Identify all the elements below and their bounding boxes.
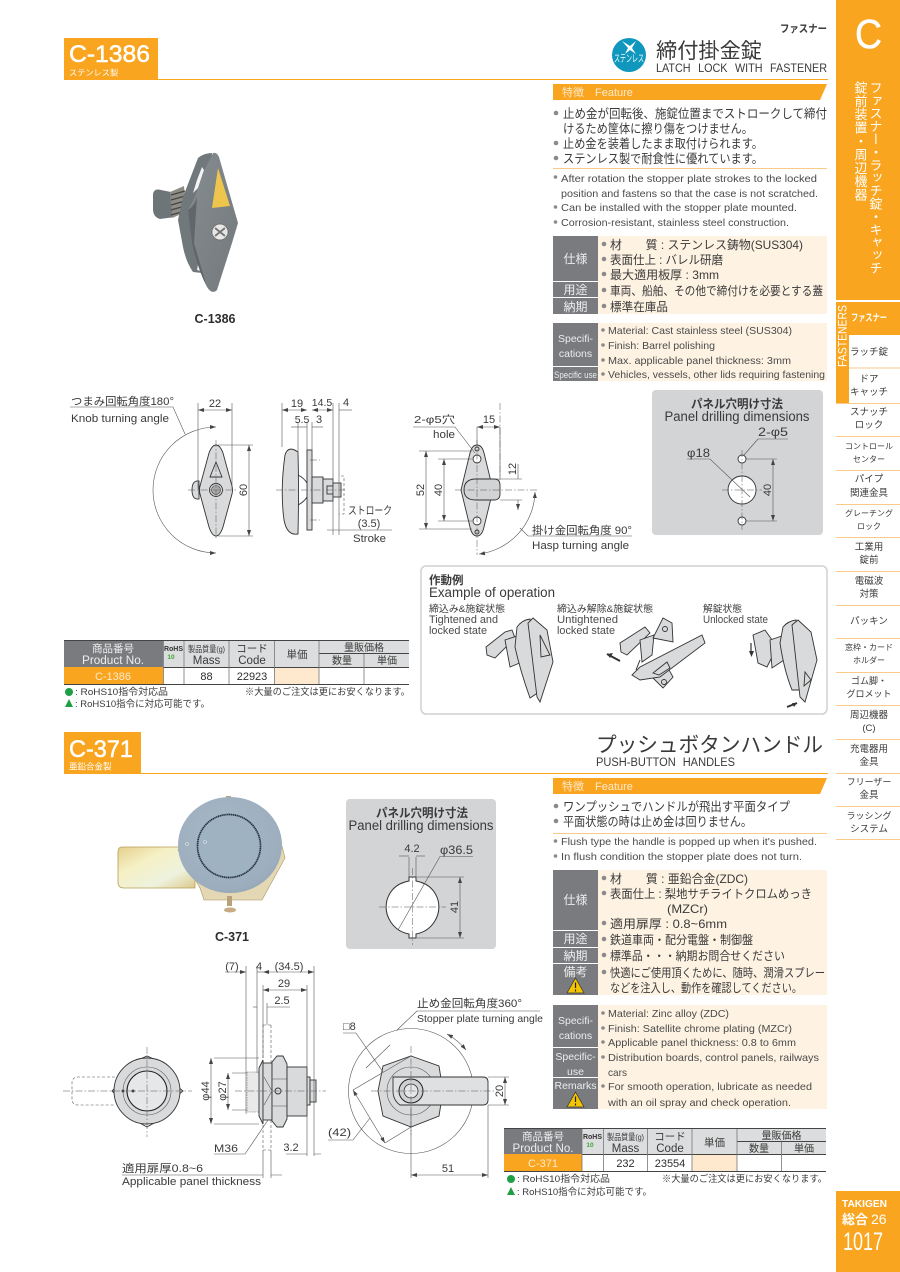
sidebar menu items: スナッチ: [850, 407, 888, 418]
dimension drawing: knob front view: [70, 395, 253, 553]
table headers: コード: [654, 1131, 686, 1143]
hasp view dimension labels: 52: [415, 484, 427, 496]
figure: tightened state: [486, 618, 553, 702]
table notes: C-1386: : RoHS10指令対応品: [75, 686, 168, 698]
feature list English: In flush condition the stopper plate does not turn.: [561, 851, 802, 863]
spec table English: Distribution boards, control panels, railways: [608, 1052, 819, 1064]
spec table Japanese: 標準品・・・納期お問合せください: [610, 948, 785, 963]
side view dimension labels: 4: [256, 961, 262, 973]
panel: drilling dimensions C-371: [346, 799, 496, 949]
sidebar menu items: センター: [853, 455, 885, 464]
table headers: 商品番号: [92, 642, 134, 655]
sidebar menu items: ロック: [855, 420, 883, 431]
feature list Japanese: [554, 106, 827, 166]
sidebar menu items: 金具: [859, 789, 879, 801]
spec table English: Applicable panel thickness: 0.8 to 6mm: [608, 1037, 796, 1049]
side view dimension labels: 2.5: [274, 995, 290, 1007]
rear view dimension labels: 止め金回転角度360°: [417, 997, 522, 1010]
spec table Japanese: 用途: [563, 283, 588, 297]
feature list English: [554, 173, 818, 229]
spec table Japanese: 用途: [563, 932, 588, 946]
knob dimension labels: [71, 395, 250, 496]
spec table English: with an oil spray and check operation.: [607, 1097, 791, 1109]
page number block: TAKIGEN: [842, 1199, 887, 1210]
sidebar menu items: ラッチ錠: [850, 347, 888, 358]
FASTENERS tab: FASTENERS: [838, 305, 850, 367]
hasp view dimension labels: Hasp turning angle: [532, 540, 629, 552]
sidebar menu items: 対策: [859, 588, 879, 600]
table row: 23554: [655, 1158, 685, 1170]
table headers: 数量: [332, 654, 352, 667]
table headers: 商品番号: [522, 1130, 564, 1143]
sidebar menu items: 充電器用: [850, 744, 888, 755]
table row: 22923: [237, 671, 267, 683]
product title: 締付掛金錠: [656, 40, 762, 63]
dimension drawing: latch side view: [276, 397, 392, 545]
table notes: C-1386: ※大量のご注文は更にお安くなります。: [245, 686, 410, 698]
table row: 232: [616, 1158, 635, 1170]
knob dimension labels: Knob turning angle: [71, 413, 169, 425]
spec table Japanese: 材 質 : 亜鉛合金(ZDC): [610, 871, 748, 886]
spec table Japanese: 仕様: [563, 893, 588, 907]
spec table English: Finish: Barrel polishing: [608, 340, 715, 352]
side view dimension labels: (3.5): [358, 518, 380, 530]
sidebar menu items: (C): [862, 723, 876, 734]
sidebar menu items: グロメット: [846, 688, 892, 699]
feature list Japanese: けるため筐体に擦り傷をつけません。: [563, 121, 753, 136]
table headers: Product No.: [512, 1143, 574, 1155]
state labels: [429, 603, 768, 637]
spec table Japanese: 材 質 : ステンレス鋳物(SUS304): [610, 237, 803, 252]
state labels: locked state: [429, 625, 487, 637]
figure: untightened state: [607, 618, 705, 688]
spec table English: Vehicles, vessels, other lids requiring fastening: [608, 369, 825, 381]
table headers: Mass: [193, 655, 220, 667]
side view dimension labels: 4: [343, 397, 349, 409]
hasp view dimension labels: 2-φ5穴: [414, 414, 456, 426]
page number block: 26: [871, 1211, 887, 1227]
state labels: 解錠状態: [703, 603, 742, 615]
feature panel: C-1386: [553, 84, 827, 381]
hasp view dimension labels: [414, 414, 632, 552]
state labels: 締込み解除&施錠状態: [557, 603, 654, 615]
panel: drilling dimensions C-1386: 40: [762, 484, 774, 496]
panel: drilling dimensions C-371: 41: [449, 901, 461, 913]
operation heading: Example of operation: [429, 585, 555, 600]
figure: unlocked state: [749, 620, 817, 707]
product photo: C-1386 latch: [153, 153, 238, 292]
side view dimension labels: 29: [278, 978, 290, 990]
product subtitle: PUSH-BUTTON HANDLES: [596, 757, 735, 769]
state labels: Tightened and: [429, 614, 498, 626]
state labels: locked state: [557, 625, 615, 637]
spec table Japanese: などを注入し、動作を確認してください。: [610, 980, 802, 995]
feature heading bar: 特徴 Feature: [562, 85, 633, 99]
FASTENERS tab: ファスナー: [851, 313, 887, 324]
table row: [95, 671, 267, 683]
sidebar menu items: キャッチ: [850, 387, 888, 398]
feature list Japanese: 止め金を装着したまま取付けられます。: [563, 136, 763, 151]
product subtitle: LATCH LOCK WITH FASTENER: [656, 61, 827, 75]
feature list English: position and fastens so that the case is not scratched.: [561, 188, 818, 200]
table headers: 単価: [377, 654, 397, 667]
panel: drilling dimensions C-371: 4.2: [404, 843, 420, 855]
feature list Japanese: 平面状態の時は止め金は回りません。: [563, 815, 752, 829]
spec table English: Specifi-: [558, 1015, 594, 1027]
panel: drilling dimensions C-371: パネル穴明け寸法: [376, 805, 468, 820]
rear view dimension labels: (42): [328, 1127, 351, 1139]
feature heading bar: [553, 778, 827, 794]
spec table English: Material: Cast stainless steel (SUS304): [608, 325, 792, 337]
sidebar menu items: 周辺機器: [850, 709, 888, 721]
table headers: Mass: [612, 1143, 639, 1155]
sidebar menu items: ドア: [859, 374, 879, 385]
side view dimension labels: 14.5: [312, 397, 332, 409]
table headers: [512, 1129, 814, 1155]
page number block: 総合: [842, 1212, 868, 1227]
knob dimension labels: 22: [209, 398, 221, 410]
sidebar menu items: フリーザー: [847, 777, 891, 787]
spec table Japanese: 表面仕上 : バレル研磨: [610, 253, 723, 267]
icon: stainless badge: [612, 38, 646, 72]
dimension drawing: handle side view: [122, 961, 326, 1188]
spec table Japanese: 車両、船舶、その他で締付けを必要とする蓋: [610, 283, 823, 298]
product photo: C-371 handle: [118, 796, 285, 912]
spec table English: Remarks: [554, 1080, 597, 1092]
side view dimension labels: Applicable panel thickness: [122, 1176, 262, 1188]
sidebar menu items: 金具: [859, 756, 879, 768]
hasp view dimension labels: hole: [433, 429, 455, 441]
product label: C-371: C-371: [215, 930, 249, 944]
sidebar menu items: ホルダー: [853, 655, 885, 665]
state labels: 締込み&施錠状態: [429, 603, 506, 615]
sidebar menu items: コントロール: [845, 442, 893, 451]
feature list Japanese: ワンプッシュでハンドルが飛出す平面タイプ: [563, 799, 790, 814]
table headers: Code: [656, 1143, 684, 1155]
sidebar menu items: 錠前: [859, 554, 879, 566]
section header: C-371: C-371: [69, 736, 133, 763]
product label: C-1386: C-1386: [194, 312, 236, 326]
dimension drawing: handle rear view: [328, 997, 543, 1178]
spec table English: [553, 1005, 827, 1109]
sidebar menu items: ゴム脚・: [851, 675, 887, 686]
feature list Japanese: [554, 799, 790, 829]
side view dimension labels: Stroke: [353, 533, 386, 545]
spec table Japanese: [553, 870, 827, 995]
panel: example of operation: [421, 566, 827, 714]
spec table Japanese: 仕様: [563, 252, 588, 266]
hasp view dimension labels: 15: [483, 414, 495, 426]
table headers: 製品質量(g): [607, 1132, 644, 1142]
spec table Japanese: 快適にご使用頂くために、随時、潤滑スプレー: [610, 965, 825, 980]
page number block: [836, 1191, 900, 1272]
table headers: 10: [167, 654, 175, 661]
table headers: 10: [586, 1142, 594, 1149]
sidebar menu items: 工業用: [855, 541, 883, 553]
sidebar menu items: グレーチング: [845, 508, 893, 518]
sidebar menu items: ラッシング: [846, 810, 892, 821]
section header: C-371: [64, 732, 828, 774]
spec table English: [553, 323, 827, 381]
table row: [528, 1158, 685, 1170]
hasp view dimension labels: 12: [507, 463, 519, 475]
material: ステンレス製: [69, 68, 118, 78]
spec table Japanese: 適用扉厚 : 0.8~6mm: [610, 917, 727, 931]
spec table Japanese: 納期: [563, 948, 588, 963]
spec table Japanese: 納期: [563, 299, 588, 314]
category label: ファスナー: [780, 23, 827, 35]
page number block: 1017: [843, 1228, 883, 1256]
table headers: 量販価格: [762, 1129, 802, 1142]
spec table Japanese: [553, 236, 827, 314]
table notes: C-371: [507, 1173, 827, 1198]
sidebar menu items: パイプ: [855, 474, 884, 485]
table notes: C-371: ※大量のご注文は更にお安くなります。: [662, 1173, 827, 1185]
dimension drawing: hasp rear view: [413, 403, 632, 555]
spec table English: use: [567, 1066, 584, 1078]
side view dimension labels: (7): [225, 961, 239, 973]
table row: C-1386: [95, 671, 131, 683]
state labels: Unlocked state: [703, 614, 768, 626]
table row: 88: [200, 671, 213, 683]
feature panel: C-371: [553, 778, 827, 1109]
table headers: コード: [236, 643, 268, 655]
table notes: C-371: : RoHS10指令対応品: [517, 1173, 610, 1185]
table headers: RoHS: [583, 1134, 602, 1141]
table row: C-371: [528, 1158, 558, 1170]
panel: drilling dimensions C-371: φ36.5: [440, 845, 473, 857]
panel: drilling dimensions C-1386: 2-φ5: [758, 427, 788, 439]
spec table Japanese: 備考: [563, 965, 588, 979]
feature list English: After rotation the stopper plate strokes to the locked: [561, 173, 817, 185]
table notes: C-1386: [65, 686, 410, 710]
spec table English: cars: [608, 1067, 627, 1079]
table headers: 単価: [286, 648, 308, 661]
hasp view dimension labels: 40: [433, 484, 445, 496]
table headers: 単価: [794, 1142, 814, 1155]
table headers: 数量: [749, 1142, 769, 1155]
spec table English: For smooth operation, lubricate as needed: [608, 1081, 812, 1093]
table notes: C-371: : RoHS10指令に対応可能です。: [517, 1186, 652, 1198]
panel: drilling dimensions C-1386: [652, 390, 823, 535]
rear view dimension labels: 20: [494, 1085, 506, 1097]
sidebar menu items: システム: [850, 824, 888, 835]
table headers: 量販価格: [344, 641, 384, 654]
sidebar menu items: [836, 347, 900, 840]
side view dimension labels: φ27: [217, 1081, 229, 1101]
spec table English: Max. applicable panel thickness: 3mm: [608, 355, 791, 367]
table headers: Code: [238, 655, 266, 667]
table headers: Product No.: [82, 655, 144, 667]
price table: C-371: [504, 1128, 826, 1172]
panel: drilling dimensions C-1386: Panel drilling dimensions: [664, 409, 810, 424]
table headers: 製品質量(g): [188, 644, 225, 654]
spec table Japanese: 表面仕上 : 梨地サチライトクロムめっき: [610, 887, 812, 901]
spec table English: Specific use: [554, 370, 597, 380]
spec table Japanese: 鉄道車両・配分電盤・制御盤: [610, 932, 753, 947]
state labels: Untightened: [557, 614, 618, 626]
table headers: RoHS: [164, 646, 183, 653]
panel: drilling dimensions C-371: Panel drilling dimensions: [348, 818, 494, 833]
model number: C-1386: [69, 41, 150, 68]
vertical category title: ファスナー・ラッチ錠・キャッチ: [868, 81, 882, 275]
section header: C-1386: [64, 23, 828, 80]
feature list English: Flush type the handle is popped up when it's pushed.: [561, 836, 817, 848]
rear view dimension labels: □8: [343, 1021, 356, 1033]
side view dimension labels: [122, 961, 303, 1188]
knob dimension labels: 60: [238, 484, 250, 496]
icon: warning triangle: [567, 978, 584, 993]
table headers: [82, 641, 397, 667]
spec table English: Specifi-: [558, 333, 594, 345]
spec table Japanese: 標準在庫品: [610, 299, 668, 314]
FASTENERS tab: [836, 302, 900, 403]
side view dimension labels: 3: [316, 414, 322, 426]
side view dimension labels: 19: [291, 398, 303, 410]
section header: C-371: 亜鉛合金製: [69, 762, 112, 772]
spec table Japanese: 最大適用板厚 : 3mm: [610, 268, 719, 282]
side view dimension labels: 5.5: [295, 414, 309, 426]
sidebar menu items: パッキン: [850, 616, 888, 627]
side view dimension labels: M36: [214, 1143, 238, 1155]
spec table English: cations: [559, 348, 592, 360]
icon: stainless badge: ステンレス: [614, 54, 644, 65]
table headers: 単価: [704, 1136, 725, 1149]
feature list Japanese: ステンレス製で耐食性に優れています。: [563, 152, 763, 166]
spec table English: Material: Zinc alloy (ZDC): [608, 1008, 729, 1020]
section letter C: C: [855, 11, 882, 57]
spec table English: cations: [559, 1030, 592, 1042]
vertical category subtitle: 錠前装置・周辺機器: [852, 81, 868, 202]
sidebar menu items: 窓枠・カード: [845, 642, 893, 652]
spec table English: Finish: Satellite chrome plating (MZCr): [608, 1023, 792, 1035]
spec table Japanese: (MZCr): [667, 902, 708, 916]
price table: C-1386: [64, 640, 409, 684]
sidebar: [836, 0, 900, 1272]
spec table English: Specific-: [555, 1051, 596, 1063]
sidebar menu items: 関連金具: [850, 487, 888, 499]
side view dimension labels: 適用扉厚0.8~6: [122, 1161, 203, 1175]
sidebar menu items: 電磁波: [855, 575, 884, 587]
knob dimension labels: つまみ回転角度180°: [71, 395, 174, 408]
feature list English: [554, 836, 817, 863]
panel: drilling dimensions C-1386: パネル穴明け寸法: [691, 396, 783, 411]
side view dimension labels: (34.5): [275, 961, 303, 973]
product title: プッシュボタンハンドル: [596, 734, 823, 757]
rear view dimension labels: [328, 997, 543, 1175]
feature list English: Can be installed with the stopper plate mounted.: [561, 202, 797, 214]
feature heading bar: [553, 84, 827, 100]
operation heading: 作動例: [429, 573, 464, 587]
panel: drilling dimensions C-1386: φ18: [687, 448, 710, 460]
operation heading: [429, 573, 555, 600]
dimension drawing: handle front view: [63, 1047, 192, 1137]
hasp view dimension labels: 掛け金回転角度 90°: [532, 523, 632, 537]
rear view dimension labels: Stopper plate turning angle: [417, 1013, 543, 1025]
feature heading bar: 特徴 Feature: [562, 779, 633, 793]
rear view dimension labels: 51: [442, 1163, 454, 1175]
side view dimension labels: [291, 397, 392, 545]
sidebar menu items: ロック: [857, 522, 881, 531]
side view dimension labels: φ44: [200, 1081, 212, 1101]
feature list Japanese: 止め金が回転後、施錠位置までストロークして締付: [563, 106, 827, 121]
table notes: C-1386: : RoHS10指令に対応可能です。: [75, 698, 210, 710]
icon: warning triangle: [567, 1092, 584, 1107]
side view dimension labels: 3.2: [283, 1142, 299, 1154]
side view dimension labels: ストローク: [348, 504, 392, 517]
feature list English: Corrosion-resistant, stainless steel construction.: [561, 217, 789, 229]
